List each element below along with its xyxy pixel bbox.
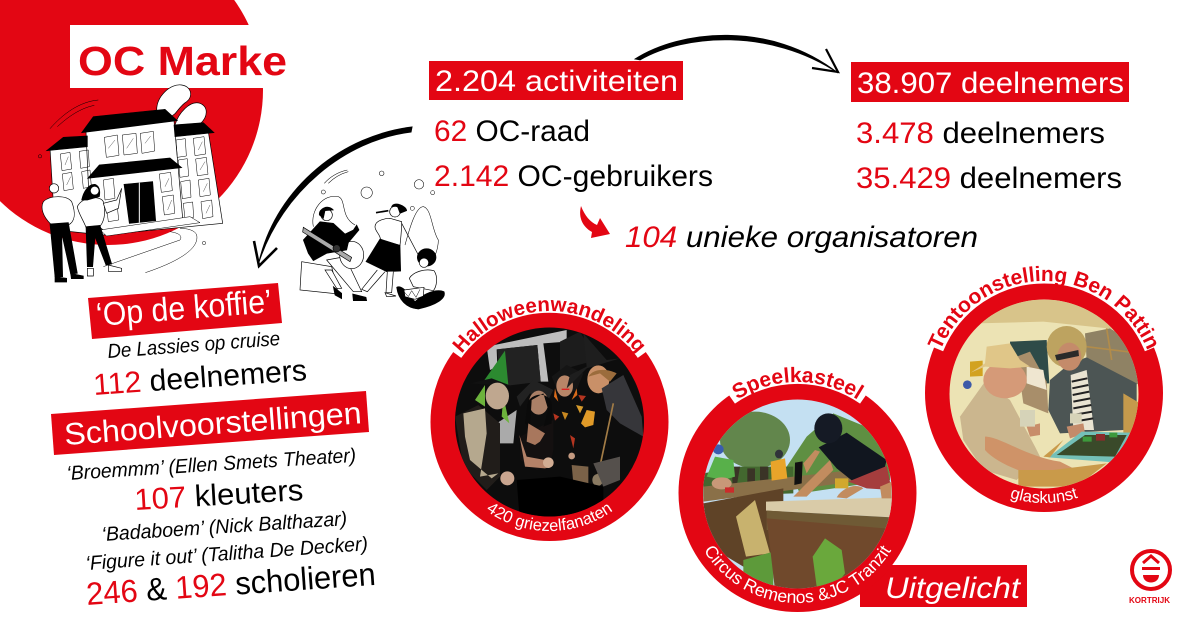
stat: 104 unieke organisatoren: 104 unieke organisatoren — [625, 221, 978, 254]
stat: 2.142 OC-gebruikers: 2.142 OC-gebruikers — [434, 160, 713, 193]
title: OC Marke — [70, 25, 287, 88]
logo: Kortrijk — [1129, 551, 1170, 605]
stat: 62 OC-raad: 62 OC-raad — [434, 115, 590, 148]
text: Badaboem: ‘Badaboem’ (Nick Balthazar) — [101, 508, 348, 546]
text: Figure it out: ‘Figure it out’ (Talitha De Decker) — [85, 533, 369, 575]
callout: Uitgelicht: Uitgelicht — [885, 572, 1022, 605]
label: Halloweenwandeling: Halloweenwandeling — [452, 300, 644, 354]
heading: 38.907 deelnemers: 38.907 deelnemers — [857, 67, 1124, 100]
text: De Lassies op cruise: De Lassies op cruise — [107, 328, 281, 363]
arrow: top curved arrow — [635, 35, 838, 73]
gap behind curved title — [931, 271, 1157, 346]
title: OC Marke: OC Marke — [78, 38, 287, 84]
stat: 107 kleuters: 107 kleuters — [133, 474, 304, 517]
stat: 246 & 192 scholieren: 246 & 192 scholieren — [85, 556, 377, 612]
panel: Tentoonstelling Ben Pattin photo circle — [925, 266, 1163, 512]
arrow: red arrow — [580, 206, 610, 238]
callout: Uitgelicht — [860, 565, 1027, 607]
photo: glass art exhibition — [949, 299, 1140, 489]
heading: 2.204 activiteiten: 2.204 activiteiten — [435, 65, 678, 98]
panel: Op de koffie — [88, 282, 308, 402]
label: glaskunst: glaskunst — [1010, 488, 1078, 503]
stat: 35.429 deelnemers: 35.429 deelnemers — [856, 162, 1122, 195]
panel: Speelkasteel photo circle — [678, 366, 916, 612]
label: Speelkasteel: Speelkasteel — [732, 366, 864, 399]
panel: Schoolvoorstellingen: Schoolvoorstellingen — [63, 395, 363, 452]
label: 420 griezelfanaten: 420 griezelfanaten — [488, 504, 612, 532]
stat: 112 deelnemers: 112 deelnemers — [92, 354, 308, 402]
photo: witches — [454, 327, 644, 523]
gap behind curved title — [451, 300, 648, 350]
panel: Op de koffie: ‘Op de koffie’ — [95, 282, 273, 333]
panel: Halloweenwandeling photo circle — [430, 300, 668, 541]
illustration: building with two people — [38, 85, 223, 282]
panel: Schoolvoorstellingen — [51, 391, 377, 612]
gap behind curved title — [728, 371, 868, 393]
text: Broemmm: ‘Broemmm’ (Ellen Smets Theater) — [66, 445, 357, 485]
stat: 3.478 deelnemers: 3.478 deelnemers — [856, 117, 1105, 150]
logo: Kortrijk: KORTRIJK — [1129, 596, 1170, 605]
illustration: musicians — [300, 170, 444, 309]
label: Circus Remenos & JC Tranzit: Circus Remenos &JC Tranzit — [706, 546, 892, 604]
background circle — [0, 0, 263, 245]
label: Tentoonstelling Ben Pattin: Tentoonstelling Ben Pattin — [927, 266, 1156, 350]
arrow: left curved arrow to concert — [254, 127, 412, 266]
photo: wooden castle — [702, 399, 892, 590]
